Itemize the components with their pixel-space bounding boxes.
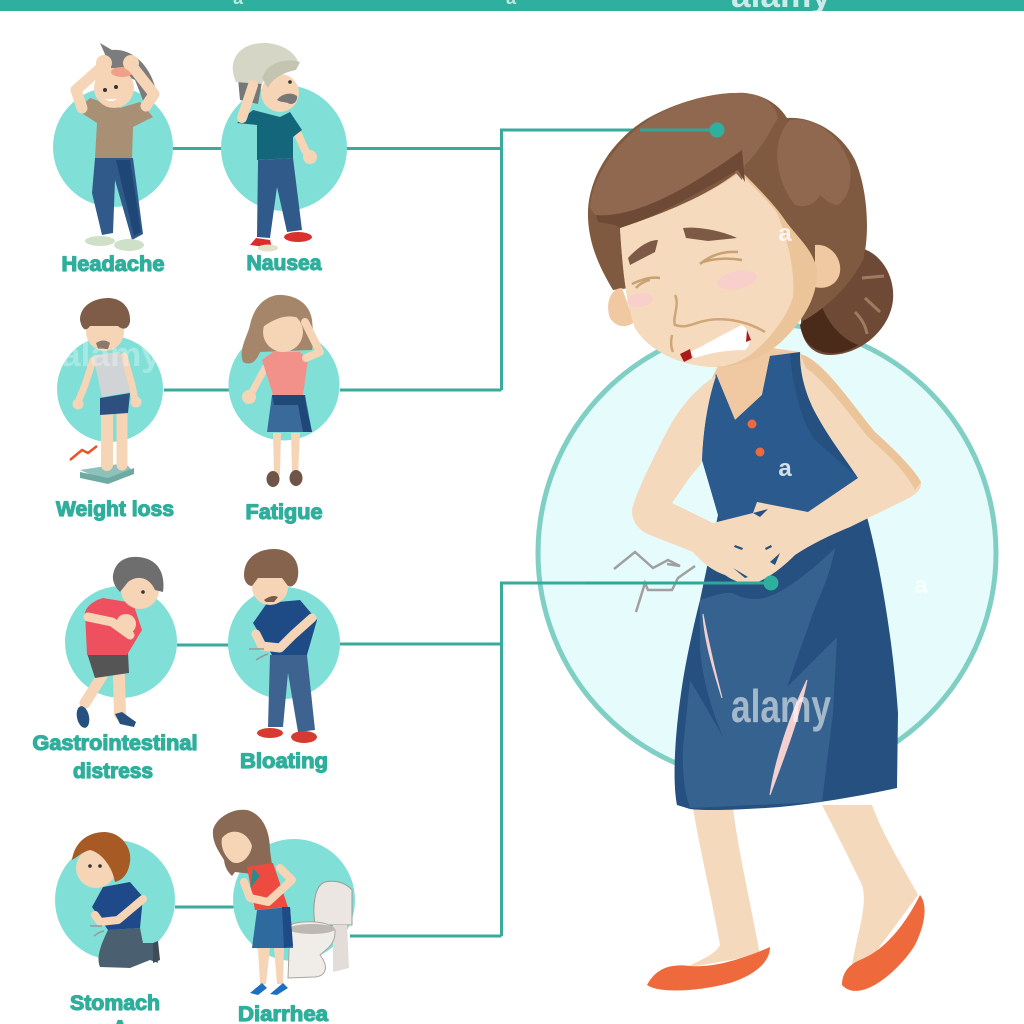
symptom: gastrointestinal distress — [65, 557, 177, 729]
label: Stomach: Stomach — [70, 992, 160, 1015]
neck and chest skin — [712, 348, 808, 420]
label: Headache: Headache — [62, 253, 164, 276]
arms and hands — [632, 354, 921, 584]
bun — [801, 248, 893, 355]
watermarks: a — [778, 455, 792, 482]
dress buttons — [748, 420, 756, 428]
mouth — [690, 325, 750, 358]
face — [620, 170, 817, 367]
large background circle — [538, 324, 996, 782]
eyes — [632, 252, 742, 288]
hair fringe — [590, 93, 778, 222]
watermarks: a — [778, 220, 792, 247]
top teal band — [0, 0, 1024, 15]
symptom: nausea — [221, 43, 347, 251]
ears — [815, 245, 840, 288]
label: Nausea: Nausea — [246, 252, 322, 275]
eyebrows — [683, 228, 737, 241]
watermarks: a — [914, 572, 928, 599]
abdomen pointer — [585, 576, 778, 590]
skirt highlights — [703, 614, 722, 698]
shoes — [647, 947, 770, 991]
legs — [685, 808, 760, 968]
symptom: headache — [53, 43, 173, 251]
finger shadows — [733, 509, 780, 578]
label: Weight loss: Weight loss — [56, 498, 174, 521]
cheeks — [716, 267, 758, 293]
nose and mouth lines — [671, 295, 765, 352]
arm shading — [800, 354, 921, 490]
symptom: bloating — [228, 549, 340, 743]
symptom: weight loss: alamy — [61, 336, 161, 374]
symptom: stomach ache — [55, 832, 175, 968]
skirt light panel — [683, 548, 837, 808]
label: Gastrointestinal distress: distress — [73, 760, 153, 783]
label: Bloating: Bloating — [240, 750, 328, 773]
symptom: fatigue — [228, 295, 340, 487]
icon: toilet — [288, 881, 352, 978]
label: Fatigue: Fatigue — [246, 501, 322, 524]
pain squiggle — [614, 552, 695, 612]
dress — [675, 352, 898, 810]
hair right lobe — [777, 119, 850, 206]
head pointer — [640, 122, 724, 138]
connector lines — [164, 130, 640, 936]
label: Gastrointestinal distress: Gastrointestinal — [32, 732, 198, 755]
symptom: diarrhea — [213, 810, 355, 995]
symptom: weight loss — [57, 298, 163, 484]
main figure: woman with stomach pain — [588, 93, 925, 991]
watermarks — [731, 220, 928, 732]
watermarks: alamy — [731, 680, 831, 732]
hair back — [588, 93, 867, 320]
